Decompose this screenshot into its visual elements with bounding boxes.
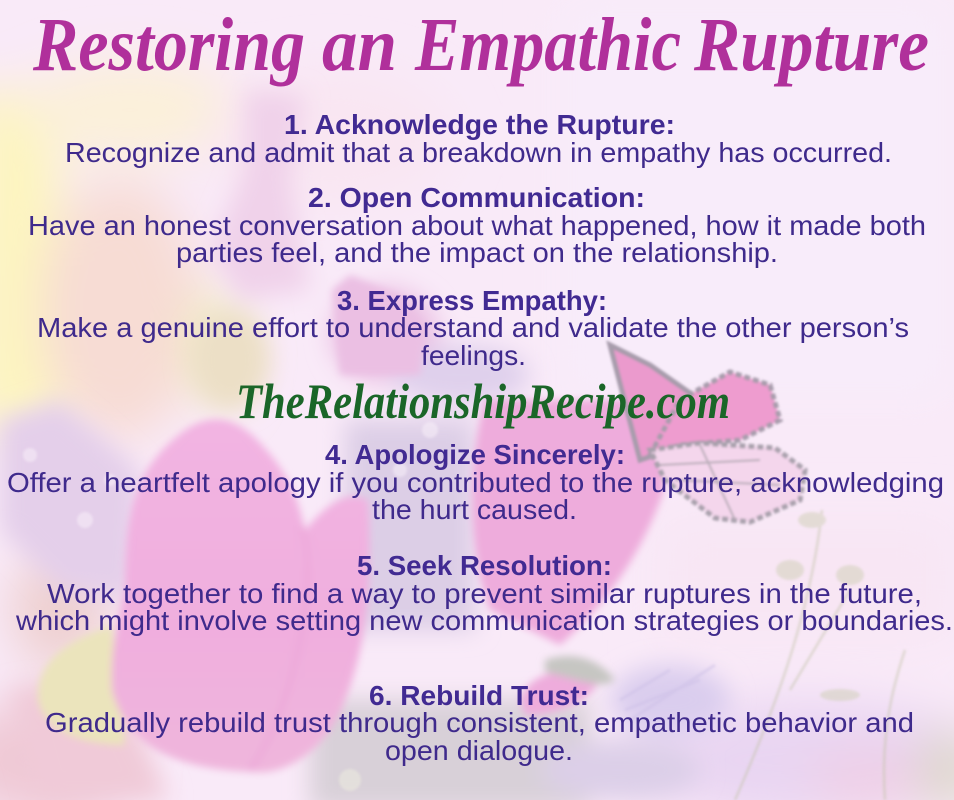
title — [32, 3, 929, 87]
flower: right pink tulip — [332, 275, 664, 715]
step 2: parties feel, and the impact on the relationship. — [176, 237, 778, 268]
step 4: Offer a heartfelt apology if you contributed to the rupture, acknowledging — [7, 467, 944, 498]
step 1: Recognize and admit that a breakdown in empathy has occurred. — [65, 137, 892, 168]
step 6 — [45, 680, 914, 766]
flower: main pink tulip — [38, 419, 370, 772]
step 3 — [37, 285, 909, 371]
step 1 — [65, 109, 892, 168]
step 4: 4. Apologize Sincerely: — [325, 439, 625, 470]
step 5 — [15, 550, 953, 636]
step 2: 2. Open Communication: — [308, 182, 645, 213]
step 2: Have an honest conversation about what happened, how it made both — [28, 210, 926, 241]
step 5: 5. Seek Resolution: — [357, 550, 612, 581]
step 3: feelings. — [421, 340, 526, 371]
step 5: which might involve setting new communication strategies or boundaries. — [15, 605, 953, 636]
step 6: Gradually rebuild trust through consistent, empathetic behavior and — [45, 707, 914, 738]
step 4: the hurt caused. — [372, 494, 577, 525]
step 2 — [28, 182, 926, 268]
step 6: 6. Rebuild Trust: — [369, 680, 589, 711]
website wordmark: TheRelationshipRecipe.com — [236, 373, 730, 429]
step 4 — [7, 439, 944, 525]
step 1: 1. Acknowledge the Rupture: — [284, 109, 675, 140]
title: Empathic — [414, 3, 681, 87]
step 5: Work together to find a way to prevent similar ruptures in the future, — [47, 578, 922, 609]
step 6: open dialogue. — [385, 735, 573, 766]
title: Rupture — [693, 3, 929, 87]
step 3: 3. Express Empathy: — [337, 285, 607, 316]
background stems and lilac speckle — [23, 422, 905, 800]
title: an — [322, 3, 397, 87]
step 3: Make a genuine effort to understand and validate the other person’s — [37, 312, 909, 343]
icon: butterfly — [610, 345, 805, 522]
title: Restoring — [32, 3, 305, 87]
